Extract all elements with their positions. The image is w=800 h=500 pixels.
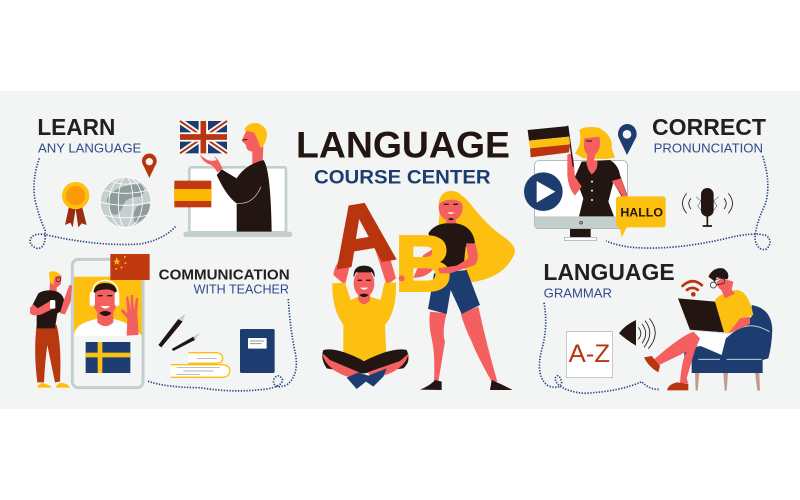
background panel — [0, 91, 800, 409]
flag: china — [110, 254, 150, 280]
speech bubble: hallo: HALLO — [620, 207, 663, 220]
laptop — [183, 167, 292, 237]
subheading: with teacher: WITH TEACHER — [194, 282, 289, 296]
icon: location pin — [618, 124, 637, 155]
letter a: A — [324, 183, 400, 287]
panel: communication with teacher — [30, 254, 296, 391]
speech bubble: hallo — [616, 196, 666, 237]
subtitle: COURSE CENTER — [314, 167, 491, 188]
person: woman with flag — [567, 127, 627, 216]
icon: play button — [524, 172, 563, 211]
woman's hand — [438, 243, 478, 273]
flag: united kingdom — [180, 121, 227, 153]
icon: speaker — [619, 318, 655, 349]
subheading: pronunciation: PRONUNCIATION — [654, 140, 763, 155]
person: teacher with uk flag — [200, 123, 272, 232]
icon: microphone — [682, 188, 732, 226]
flag: germany — [528, 126, 573, 167]
subheading: grammar: GRAMMAR — [544, 286, 612, 301]
dotted path — [30, 158, 176, 248]
heading: learn: LEARN — [37, 114, 115, 140]
panel: correct pronunciation — [524, 114, 770, 249]
flag: spain — [174, 181, 211, 207]
person with phone — [30, 271, 72, 388]
icon: pens — [158, 314, 200, 351]
armchair — [684, 305, 772, 391]
dotted path — [147, 299, 296, 391]
person: woman holding letter b — [413, 191, 515, 390]
panel: learn any language — [30, 114, 292, 248]
icon: books — [171, 353, 230, 377]
a-z card — [566, 332, 612, 378]
icon: wifi — [682, 281, 703, 295]
person on video call — [90, 280, 139, 336]
person: man with laptop — [644, 268, 753, 390]
heading: communication: COMMUNICATION — [159, 266, 290, 283]
monitor — [535, 161, 627, 241]
icon: location pin — [142, 153, 157, 178]
heading: correct: CORRECT — [652, 114, 766, 140]
panel: language grammar — [539, 259, 772, 393]
person: man holding letter a — [322, 247, 409, 389]
flag: sweden — [86, 342, 130, 373]
phone — [72, 259, 143, 388]
subheading: any language: ANY LANGUAGE — [38, 140, 141, 155]
icon: notebook — [240, 329, 275, 373]
a-z card: A-Z — [569, 341, 610, 368]
letter b: B — [395, 219, 452, 307]
icon: globe — [100, 177, 151, 228]
icon: medal — [62, 182, 89, 227]
panel: center heading and figures — [296, 124, 515, 390]
title: LANGUAGE — [296, 124, 510, 166]
dotted path — [606, 156, 770, 249]
dotted path — [539, 303, 659, 393]
heading: language: LANGUAGE — [543, 259, 675, 285]
